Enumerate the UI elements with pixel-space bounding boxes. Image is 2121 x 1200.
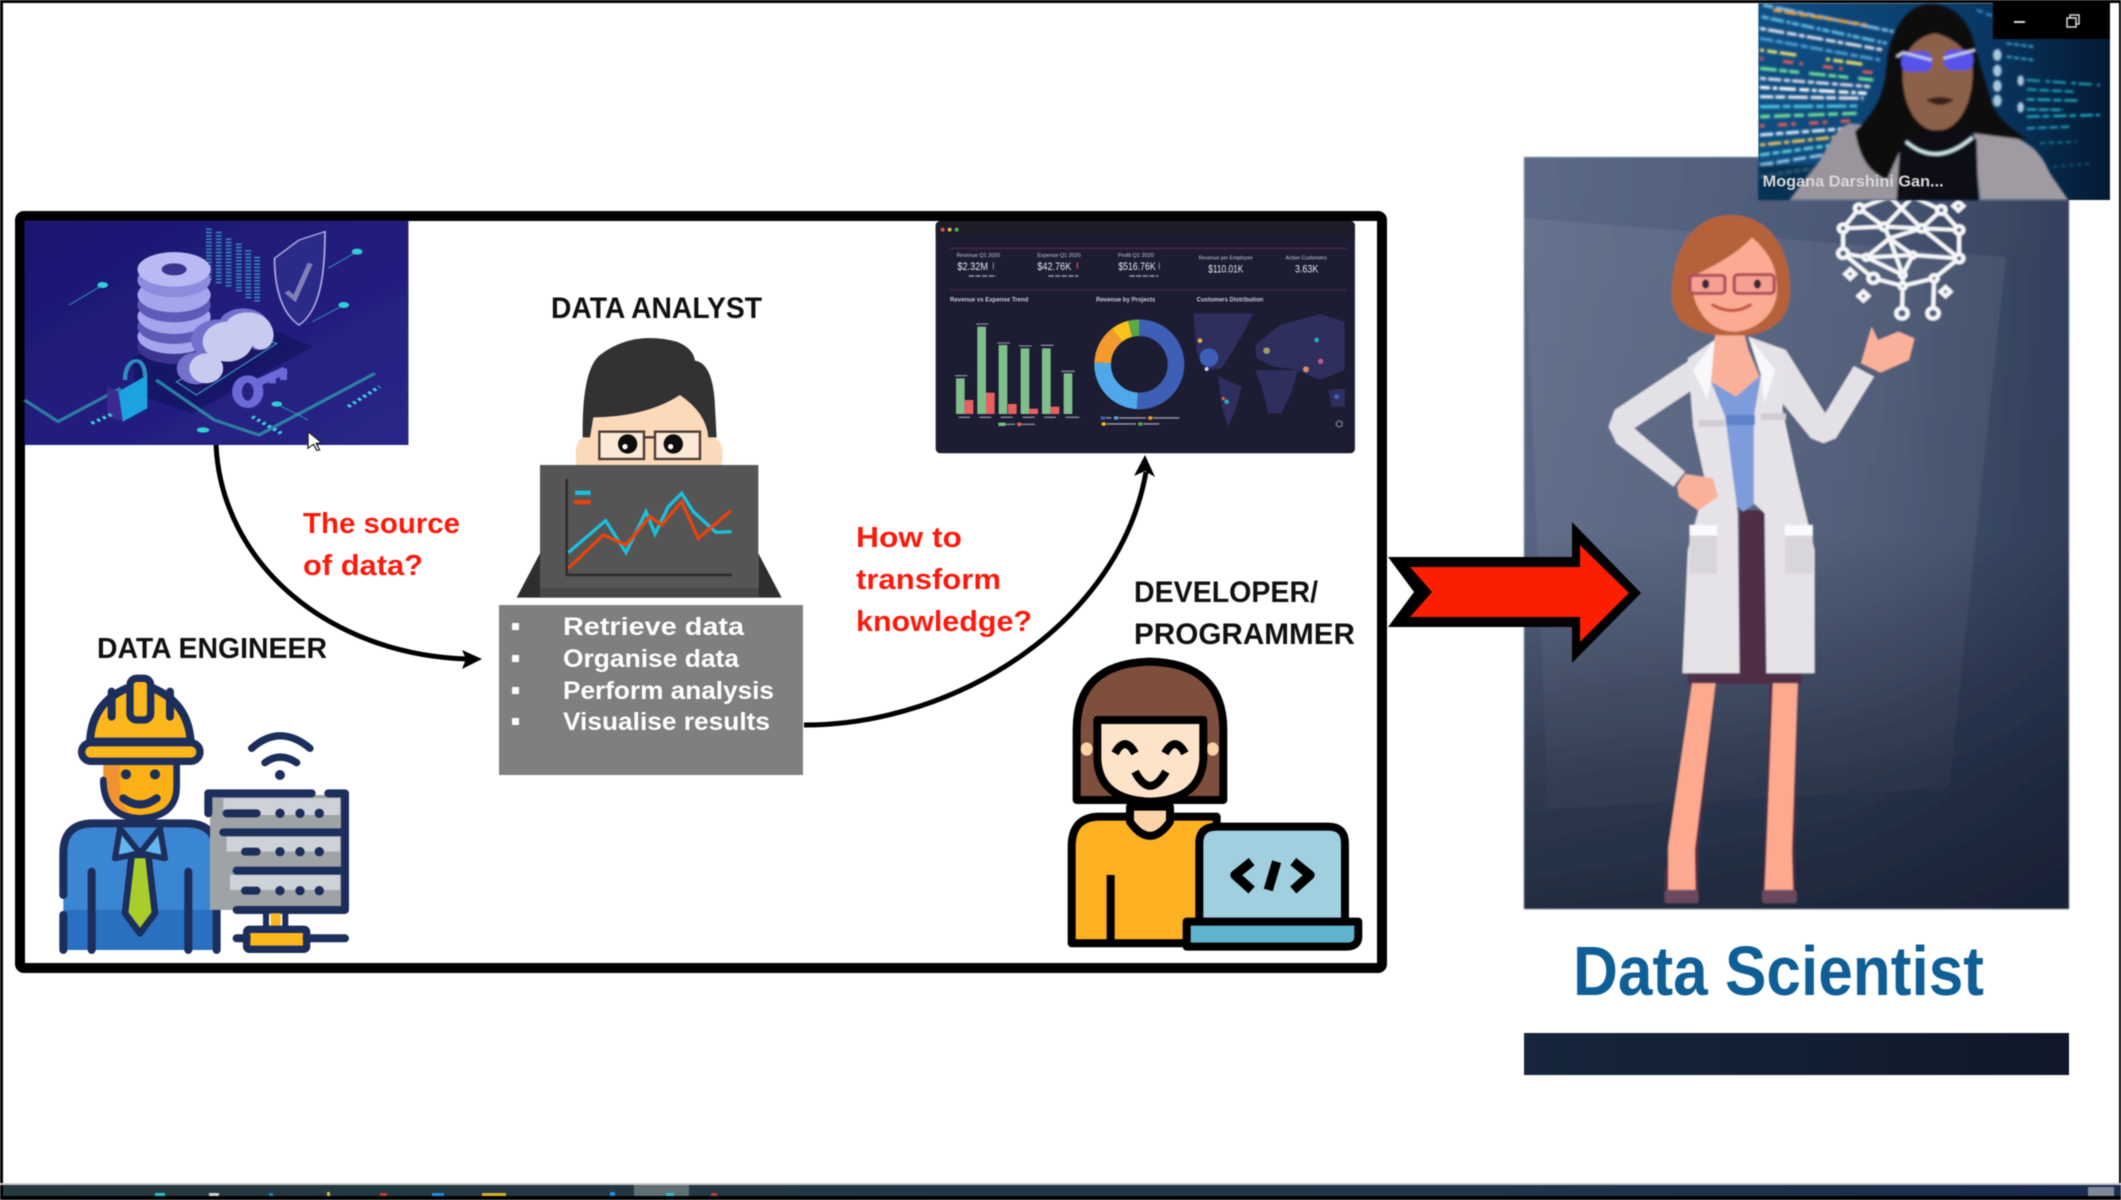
image: dashboard: Expense Q1 2020 — [1037, 253, 1081, 259]
woman in lab coat — [1609, 215, 1914, 903]
arrow: transform knowledge curve — [804, 455, 1155, 725]
map: customers distribution — [1193, 313, 1345, 427]
image: dashboard: Revenue by Projects — [1096, 296, 1156, 303]
data analyst task list box — [499, 605, 803, 775]
image: dashboard — [936, 221, 1355, 453]
panel: data scientist illustration — [1524, 157, 2069, 909]
presenter name: Mogana Darshini Gan... — [1763, 174, 1944, 191]
title: Data Scientist: Data Scientist — [1573, 932, 1984, 1010]
title: Developer / Programmer — [1134, 576, 1355, 651]
donut chart: revenue by projects — [1103, 328, 1176, 401]
text: The source of data?: of data? — [303, 550, 423, 582]
icon: developer with laptop — [1072, 662, 1358, 947]
image: dashboard: Active Customers — [1286, 256, 1327, 262]
title: Developer / Programmer: DEVELOPER/ — [1134, 576, 1319, 609]
icon: data analyst at laptop — [517, 338, 782, 598]
image: dashboard: $2.32M — [957, 261, 988, 273]
window controls — [1993, 0, 2110, 39]
data analyst task list box: Visualise results — [563, 708, 770, 736]
image: dashboard: $516.76K — [1118, 261, 1156, 273]
image: dashboard: $110.01K — [1208, 263, 1243, 275]
text: How to transform knowledge?: How to — [856, 522, 962, 554]
data analyst task list box: Retrieve data — [563, 613, 745, 641]
mouse cursor — [308, 432, 321, 451]
image: data storage and security — [25, 221, 408, 451]
image: dashboard: Revenue per Employee — [1199, 256, 1253, 262]
panel: roles frame — [20, 216, 1382, 968]
image: dashboard: Profit Q1 2020 — [1118, 253, 1154, 259]
text: How to transform knowledge?: transform — [856, 564, 1001, 596]
icon: data engineer with server — [63, 678, 345, 950]
taskbar — [0, 1183, 2121, 1200]
data analyst task list box: Organise data — [563, 645, 740, 673]
title: Data Analyst: DATA ANALYST — [551, 292, 762, 325]
image: dashboard: $42.76K — [1037, 261, 1071, 273]
icon: brain network — [1838, 197, 1963, 319]
text: The source of data?: The source — [303, 508, 460, 540]
title: Data Engineer: DATA ENGINEER — [97, 633, 327, 665]
title: Developer / Programmer: PROGRAMMER — [1134, 618, 1355, 651]
bar chart: revenue vs expense — [955, 324, 1079, 426]
image: dashboard: Customers Distribution — [1197, 296, 1263, 303]
webcam: presenter video — [1758, 3, 2110, 200]
arrow: red arrow to data scientist — [1388, 522, 1641, 663]
text: How to transform knowledge? — [856, 522, 1032, 638]
image: dashboard: Revenue vs Expense Trend — [950, 296, 1028, 303]
text: The source of data? — [303, 508, 460, 582]
text: How to transform knowledge?: knowledge? — [856, 606, 1032, 638]
data analyst task list box: Perform analysis — [563, 677, 774, 705]
image: dashboard: Revenue Q1 2020 — [957, 253, 1000, 259]
dark footer bar — [1524, 1033, 2069, 1075]
image: dashboard: 3.63K — [1295, 263, 1318, 275]
arrow: source of data curve — [216, 445, 482, 669]
